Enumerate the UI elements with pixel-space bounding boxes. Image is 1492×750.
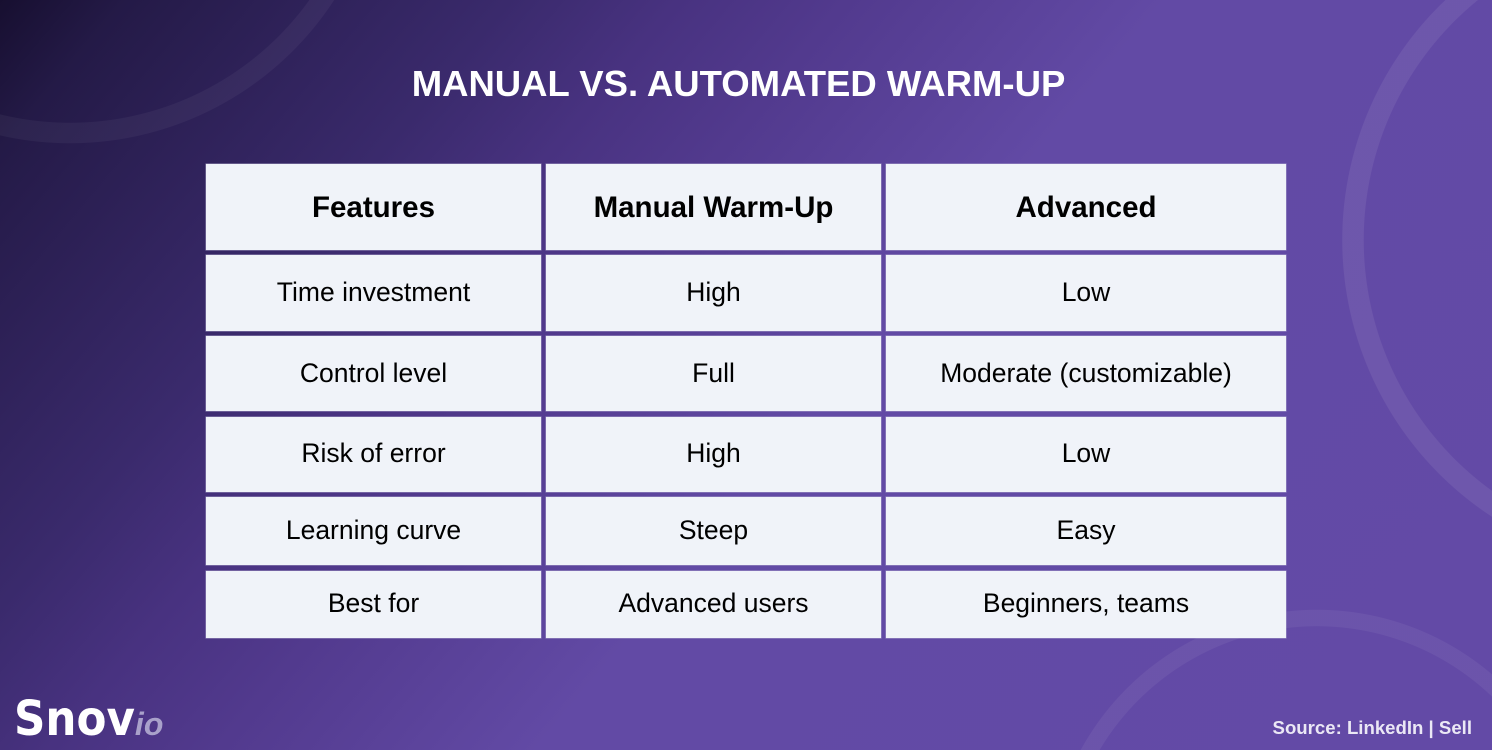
row: Learning curve advanced: Easy	[1057, 514, 1115, 544]
row: Control level label	[206, 336, 541, 411]
row: Learning curve label	[206, 497, 541, 565]
source note: Source: LinkedIn | Sell	[1273, 717, 1472, 738]
header: Manual Warm-Up	[546, 164, 881, 250]
row: Control level manual	[546, 336, 881, 411]
row: Control level advanced: Moderate (customizable)	[940, 358, 1232, 388]
row: Learning curve manual	[546, 497, 881, 565]
row: Best for manual: Advanced users	[618, 588, 809, 618]
row: Risk of error label	[206, 417, 541, 492]
row: Best for manual	[546, 571, 881, 638]
logo: Snovio: Snovio	[14, 691, 163, 747]
header: Advanced	[886, 164, 1286, 250]
row: Risk of error advanced	[886, 417, 1286, 492]
row: Risk of error advanced: Low	[1062, 438, 1110, 468]
row: Learning curve label: Learning curve	[286, 514, 461, 544]
row: Time investment manual	[546, 255, 881, 331]
row: Control level advanced	[886, 336, 1286, 411]
row: Time investment advanced	[886, 255, 1286, 331]
title: MANUAL VS. AUTOMATED WARM-UP	[412, 63, 1065, 104]
header: Features: Features	[312, 191, 435, 224]
row: Time investment label: Time investment	[277, 276, 470, 306]
row: Control level manual: Full	[692, 358, 735, 388]
comparison table	[206, 164, 1286, 638]
row: Best for label	[206, 571, 541, 638]
row: Time investment advanced: Low	[1062, 276, 1110, 306]
row: Time investment manual: High	[686, 276, 741, 306]
row: Learning curve manual: Steep	[679, 514, 748, 544]
header: Manual Warm-Up: Manual Warm-Up	[594, 191, 833, 224]
header: Features	[206, 164, 541, 250]
row: Risk of error manual	[546, 417, 881, 492]
row: Control level label: Control level	[300, 358, 447, 388]
row: Learning curve advanced	[886, 497, 1286, 565]
row: Risk of error label: Risk of error	[301, 438, 446, 468]
row: Best for advanced	[886, 571, 1286, 638]
row: Best for advanced: Beginners, teams	[983, 588, 1189, 618]
row: Best for label: Best for	[328, 588, 419, 618]
header: Advanced: Advanced	[1016, 191, 1156, 224]
row: Time investment label	[206, 255, 541, 331]
row: Risk of error manual: High	[686, 438, 741, 468]
